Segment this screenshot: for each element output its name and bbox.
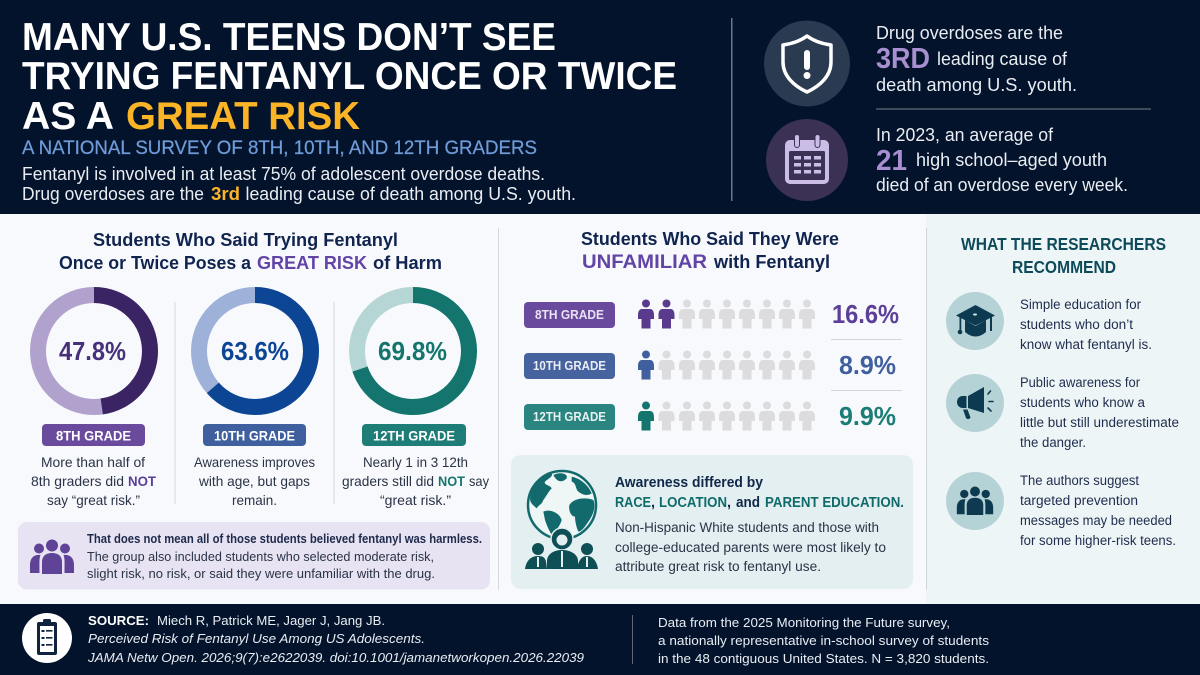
text: survey details: a nationally representative in-school survey of students [658, 633, 990, 648]
icon: globe with people [525, 471, 598, 569]
callout: awareness differed: and [736, 495, 760, 511]
callout: awareness differed: Non-Hispanic White students and those with [615, 520, 879, 535]
text: public awareness: Public awareness for [1020, 375, 1140, 390]
label: 8th grade [42, 424, 145, 446]
panel: what the researchers recommend [926, 214, 1200, 604]
row: 8th grade 16.6%: 16.6% [832, 299, 899, 329]
text: 12th grade note: Nearly 1 in 3 12th [363, 454, 468, 470]
stat: third leading cause [876, 23, 1077, 95]
stat: third leading cause: 3RD [876, 43, 930, 75]
callout: awareness differed: attribute great risk to fentanyl use. [615, 559, 821, 574]
text: targeted prevention: The authors suggest [1020, 473, 1139, 488]
title: AS A [22, 95, 114, 138]
label: 12th grade: 12TH GRADE [373, 428, 455, 444]
label: 12th grade [362, 424, 466, 446]
heading: great risk: GREAT RISK [257, 252, 368, 273]
stat: 21 youth every week [876, 125, 1128, 195]
text: survey details: in the 48 contiguous United States. N = 3,820 students. [658, 651, 989, 666]
callout: not harmless: slight risk, no risk, or said they were unfamiliar with the drug. [87, 567, 435, 581]
header summary text: 3rd [211, 184, 240, 204]
icon: people group [946, 472, 1004, 530]
text: targeted prevention: messages may be needed [1020, 513, 1172, 528]
callout: not harmless: That does not mean all of those students believed fentanyl was harmless. [87, 532, 482, 546]
heading: great risk: Students Who Said Trying Fentanyl [93, 230, 398, 250]
donut: 10th grade 63.6%: 63.6% [221, 336, 289, 366]
icon: clipboard checklist [22, 613, 72, 663]
heading: great risk: Once or Twice Poses a [59, 253, 252, 273]
icon: calendar [766, 119, 848, 201]
donut: 10th grade 63.6% [199, 295, 311, 407]
stat: third leading cause: death among U.S. youth. [876, 75, 1077, 95]
callout: awareness differed: college-educated parents were most likely to [615, 540, 886, 555]
text: targeted prevention: for some higher-risk teens. [1020, 533, 1176, 548]
text: source citation: Perceived Risk of Fentanyl Use Among US Adolescents. [88, 631, 425, 646]
donut: 8th grade 47.8% [38, 295, 150, 407]
callout: awareness differed: RACE [615, 495, 651, 511]
callout: not harmless [18, 522, 490, 590]
text: simple education: students who don’t [1020, 317, 1133, 332]
text: public awareness: little but still underestimate [1020, 415, 1179, 430]
panel: header [0, 0, 1200, 214]
callout: awareness differed: , [651, 495, 655, 511]
stat: 21 youth every week: In 2023, an average of [876, 125, 1054, 145]
title [22, 16, 677, 138]
stat: 21 youth every week: died of an overdose every week. [876, 175, 1128, 195]
text: 10th grade note: Awareness improves [194, 454, 315, 470]
text: source citation: JAMA Netw Open. 2026;9(7):e2622039. doi:10.1001/jamanetworkopen.2026.22039 [87, 650, 584, 665]
heading: recommendations: WHAT THE RESEARCHERS [961, 234, 1166, 254]
text: simple education: know what fentanyl is. [1020, 337, 1152, 352]
heading: unfamiliar: UNFAMILIAR [582, 251, 707, 273]
text: 8th grade note: NOT [128, 473, 156, 489]
callout: awareness differed [511, 455, 913, 589]
text: public awareness: students who know a [1020, 395, 1145, 410]
text: public awareness: the danger. [1020, 435, 1086, 450]
text: 12th grade note: NOT [438, 473, 465, 489]
text: 10th grade note: with age, but gaps [198, 473, 310, 489]
header summary text: Fentanyl is involved in at least 75% of adolescent overdose deaths. [22, 164, 545, 184]
text: 8th grade note [31, 454, 156, 508]
text: source citation: SOURCE: [88, 613, 149, 628]
header summary text: leading cause of death among U.S. youth. [246, 184, 576, 204]
text: public awareness [1020, 375, 1179, 450]
stat: third leading cause: leading cause of [937, 49, 1068, 69]
row: 12th grade 9.9% [524, 401, 896, 431]
heading: unfamiliar [581, 229, 839, 273]
callout: awareness differed: Awareness differed by [615, 475, 763, 491]
row: 12th grade 9.9%: 9.9% [839, 401, 896, 431]
callout: awareness differed: LOCATION [659, 495, 727, 511]
stat: third leading cause: Drug overdoses are the [876, 23, 1063, 43]
text: source citation [87, 613, 584, 665]
text: 10th grade note [194, 454, 315, 508]
text: 12th grade note: say [469, 473, 489, 489]
header summary text [22, 164, 576, 204]
panel: great risk donuts [18, 230, 490, 590]
icon: megaphone [946, 374, 1004, 432]
row: 10th grade 8.9% [524, 350, 896, 380]
icon: student group [30, 540, 74, 574]
stat: 21 youth every week: high school–aged youth [916, 150, 1107, 170]
label: 8th grade: 8TH GRADE [56, 428, 131, 444]
text: targeted prevention: targeted prevention [1020, 493, 1138, 508]
text: simple education [1020, 297, 1152, 352]
stat: 21 youth every week: 21 [876, 145, 907, 177]
heading: great risk: of Harm [373, 253, 442, 273]
text: 8th grade note: say “great risk.” [47, 492, 140, 508]
title: MANY U.S. TEENS DON’T SEE [22, 16, 556, 59]
row: 8th grade 16.6%: 8TH GRADE [535, 308, 604, 322]
title: GREAT RISK [126, 95, 360, 138]
label: 10th grade: 10TH GRADE [214, 428, 295, 444]
text: 8th grade note: More than half of [41, 454, 145, 470]
text: simple education: Simple education for [1020, 297, 1141, 312]
heading: recommendations [961, 234, 1166, 277]
donut: 12th grade 69.8%: 69.8% [378, 336, 447, 366]
icon: shield warning [764, 20, 850, 106]
heading: great risk [59, 230, 442, 273]
panel: unfamiliar with fentanyl [511, 229, 913, 589]
subtitle: A NATIONAL SURVEY OF 8TH, 10TH, AND 12TH GRADERS [22, 137, 537, 159]
row: 10th grade 8.9%: 8.9% [839, 350, 896, 380]
text: 12th grade note: “great risk.” [380, 492, 451, 508]
header summary text: Drug overdoses are the [22, 184, 204, 204]
heading: unfamiliar: Students Who Said They Were [581, 229, 839, 249]
panel: footer [0, 604, 1200, 675]
callout: awareness differed: PARENT EDUCATION. [765, 495, 904, 511]
label: 10th grade [203, 424, 306, 446]
heading: unfamiliar: with Fentanyl [713, 252, 830, 272]
text: 8th grade note: 8th graders did [31, 473, 124, 489]
row: 8th grade 16.6% [524, 299, 899, 329]
text: targeted prevention [1020, 473, 1176, 548]
text: 12th grade note: graders still did [342, 473, 434, 489]
text: survey details [658, 615, 990, 666]
donut: 12th grade 69.8% [357, 295, 469, 407]
callout: awareness differed: , [727, 495, 731, 511]
title: TRYING FENTANYL ONCE OR TWICE [22, 55, 677, 98]
text: source citation: Miech R, Patrick ME, Jager J, Jang JB. [157, 613, 385, 628]
row: 12th grade 9.9%: 12TH GRADE [533, 410, 606, 424]
icon: graduation cap [946, 292, 1004, 350]
text: 10th grade note: remain. [232, 492, 277, 508]
heading: recommendations: RECOMMEND [1012, 257, 1116, 277]
text: survey details: Data from the 2025 Monitoring the Future survey, [658, 615, 950, 630]
text: 12th grade note [342, 454, 489, 508]
row: 10th grade 8.9%: 10TH GRADE [533, 359, 606, 373]
callout: not harmless: The group also included students who selected moderate risk, [87, 550, 434, 564]
donut: 8th grade 47.8%: 47.8% [59, 336, 126, 366]
